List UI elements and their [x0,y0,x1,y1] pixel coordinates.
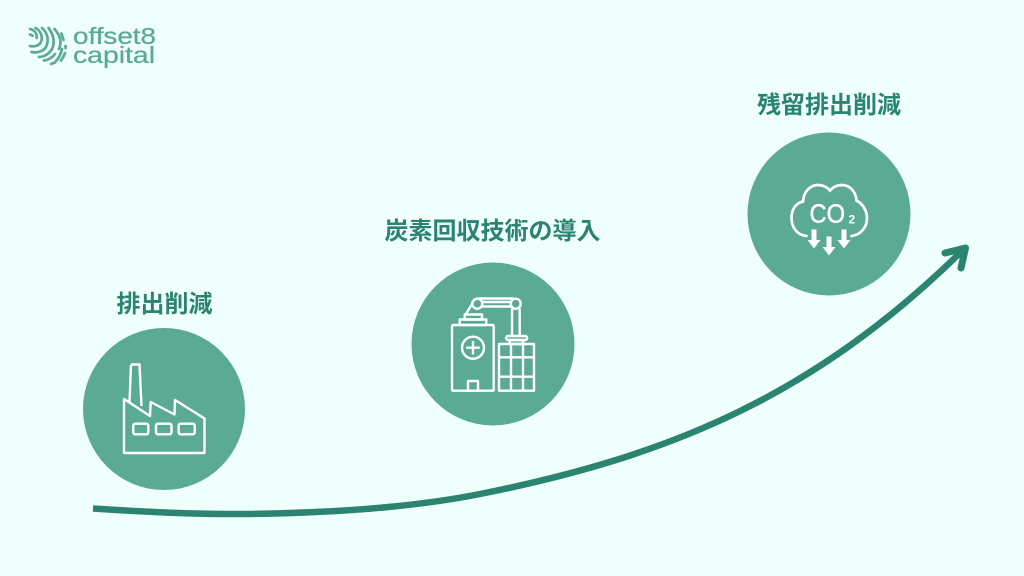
text: CO2: CO [810,198,845,228]
circle background [83,328,245,490]
icon: factory [124,364,204,453]
text: subscript 2: 2 [848,212,856,226]
logo: offset8 capital [30,23,156,68]
logo text: offset8: offset8 [73,23,156,49]
step 1: emission reduction [83,291,245,490]
logo text: capital: capital [73,42,155,68]
down arrows [808,230,850,256]
heading: 残留排出削減: 残留排出削減 [757,91,901,119]
growth curve arrow [93,248,966,514]
step 3: residual emission reduction [748,91,910,296]
step 2: carbon capture technology [384,218,600,426]
circle background [748,132,910,296]
heading: 排出削減: 排出削減 [116,291,212,318]
heading: 炭素回収技術の導入: 炭素回収技術の導入 [384,218,600,245]
cloud outline [792,185,867,236]
icon: fingerprint logo mark [30,28,66,64]
icon: CO2 cloud with down arrows [792,185,867,256]
icon: capture plant with robotic arm [452,298,534,391]
circle background [412,262,574,426]
